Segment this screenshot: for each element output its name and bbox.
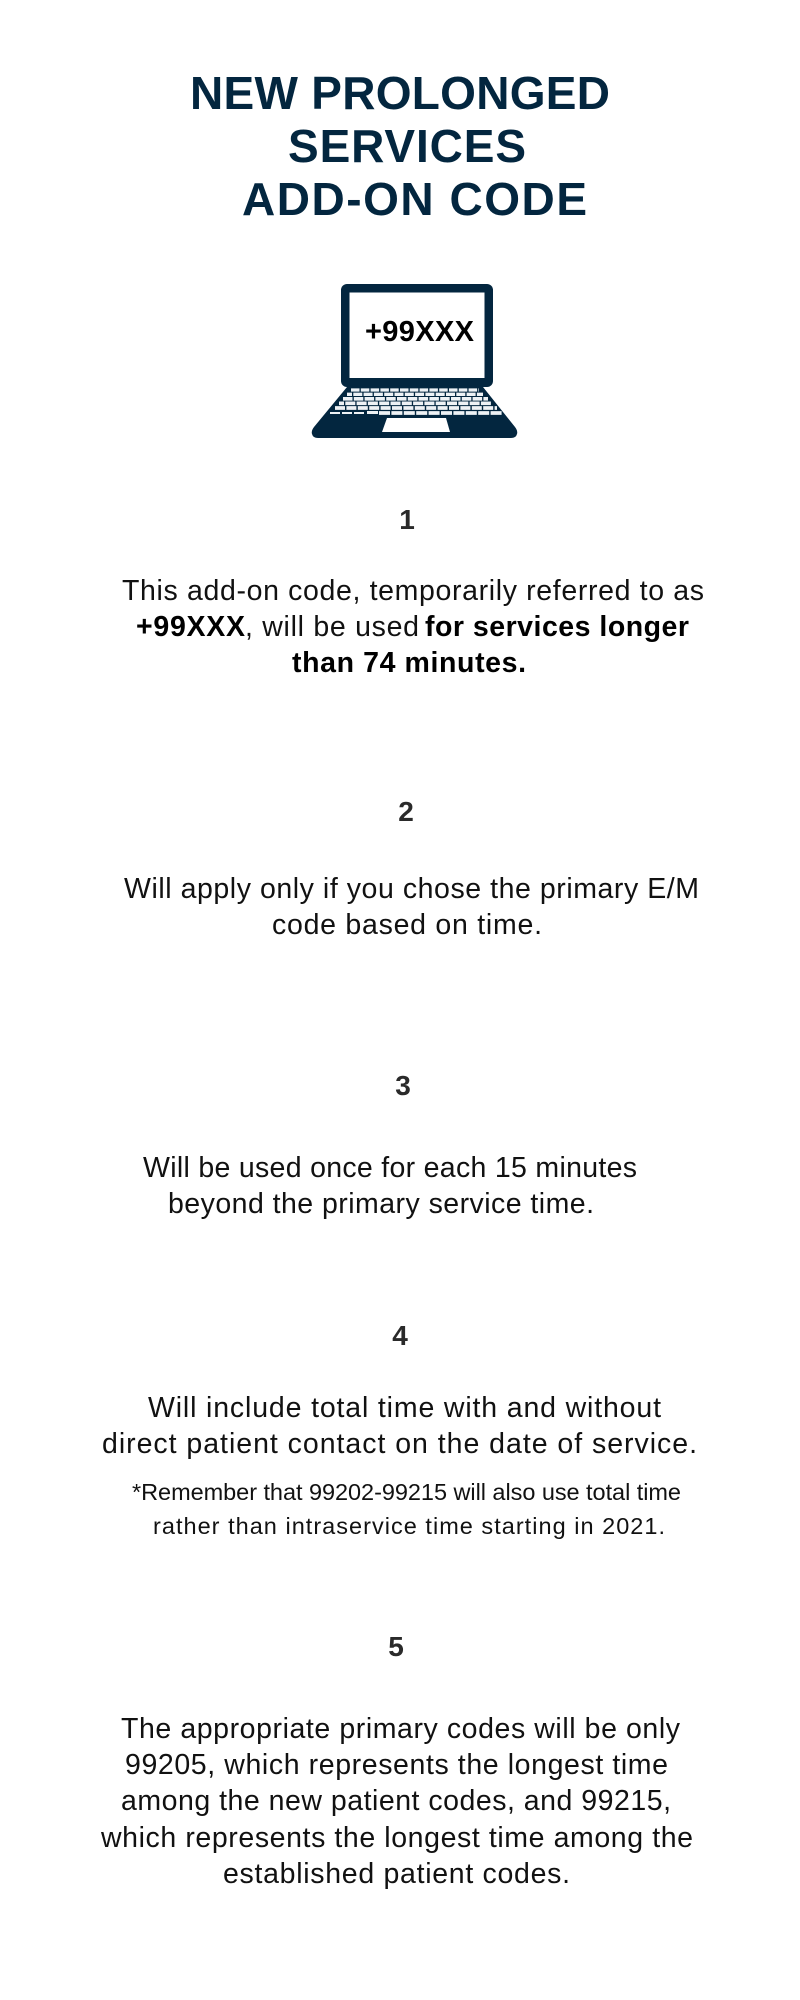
number 4: 4 bbox=[392, 1320, 408, 1351]
icon: laptop showing +99XXX bbox=[312, 284, 517, 438]
item 4 footnote: *Remember that 99202-99215 will also use total time bbox=[132, 1479, 681, 1505]
item 5 text: 99205, which represents the longest time bbox=[125, 1749, 668, 1781]
title: NEW PROLONGED bbox=[190, 67, 610, 119]
item 4 footnote: rather than intraservice time starting in 2021. bbox=[153, 1513, 665, 1539]
item 5 text: established patient codes. bbox=[223, 1858, 570, 1890]
item 2 text bbox=[124, 873, 699, 941]
item 1 text: +99XXX bbox=[136, 611, 245, 643]
item 5 text: The appropriate primary codes will be only bbox=[121, 1713, 681, 1745]
item 4 footnote bbox=[132, 1479, 681, 1539]
laptop base with keyboard bbox=[312, 387, 517, 438]
item 3 text: Will be used once for each 15 minutes bbox=[143, 1152, 637, 1184]
number 5: 5 bbox=[388, 1631, 404, 1662]
item 2 text: Will apply only if you chose the primary E/M bbox=[124, 873, 699, 905]
item 5 text bbox=[100, 1713, 693, 1890]
number 1: 1 bbox=[399, 504, 415, 535]
item 3 text: beyond the primary service time. bbox=[168, 1188, 594, 1220]
item 2 bbox=[124, 796, 699, 941]
number 2: 2 bbox=[398, 796, 414, 827]
item 5 text: among the new patient codes, and 99215, bbox=[121, 1785, 671, 1817]
title bbox=[190, 67, 610, 225]
item 1 bbox=[122, 504, 704, 679]
item 2 text: code based on time. bbox=[272, 909, 542, 941]
item 4 bbox=[102, 1320, 697, 1539]
item 1 text: , will be used bbox=[245, 611, 419, 643]
item 3 text bbox=[143, 1152, 637, 1220]
item 3 bbox=[143, 1070, 637, 1220]
item 1 text: for services longer bbox=[425, 611, 689, 643]
laptop screen bbox=[341, 284, 493, 387]
item 5 text: which represents the longest time among the bbox=[100, 1822, 693, 1854]
item 4 text: direct patient contact on the date of service. bbox=[102, 1428, 697, 1460]
item 4 text: Will include total time with and without bbox=[148, 1392, 661, 1424]
item 1 text bbox=[122, 575, 704, 679]
item 1 text: than 74 minutes. bbox=[292, 647, 526, 679]
laptop screen: +99XXX bbox=[365, 316, 475, 348]
number 3: 3 bbox=[395, 1070, 411, 1101]
item 4 text bbox=[102, 1392, 697, 1460]
item 1 text: This add-on code, temporarily referred to as bbox=[122, 575, 704, 607]
title: SERVICES bbox=[288, 120, 526, 172]
title: ADD-ON CODE bbox=[242, 173, 587, 225]
item 5 bbox=[100, 1631, 693, 1890]
